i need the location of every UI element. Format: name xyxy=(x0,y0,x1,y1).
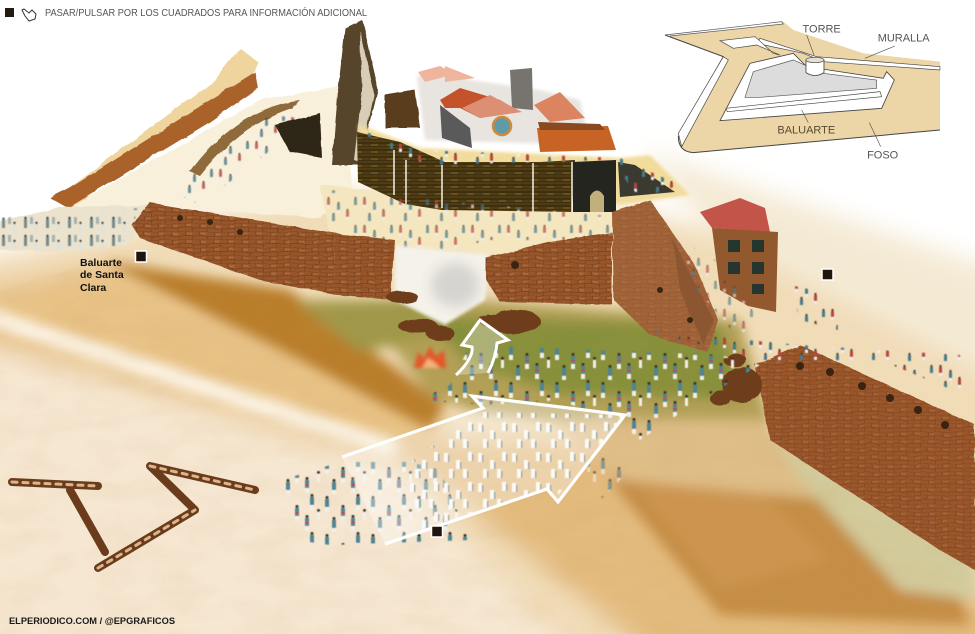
hotspot marker: right xyxy=(822,269,833,280)
rubble in the breach xyxy=(386,291,762,406)
label: Baluarte de Santa Clara: de Santa xyxy=(80,269,124,281)
arrow: main assault direction xyxy=(342,396,625,544)
arrow: breach direction xyxy=(456,320,508,375)
label: Baluarte de Santa Clara: Baluarte xyxy=(80,257,122,269)
icon: pointing hand xyxy=(22,9,36,21)
loopholes in walls xyxy=(177,215,949,429)
inset: fortress diagram: TORRE xyxy=(803,24,841,36)
legend: hover instruction: PASAR/PULSAR POR LOS CUADRADOS PARA INFORMACIÓN ADICIONAL xyxy=(45,8,368,19)
defenders on the wall walk xyxy=(320,130,680,260)
inset: fortress diagram: BALUARTE xyxy=(777,125,835,137)
upper fortress wall xyxy=(357,124,690,212)
terrain: upper left rampart bank xyxy=(0,48,650,255)
hotspot marker: arrow xyxy=(432,526,442,537)
smoke in the breach xyxy=(431,263,479,307)
assaulting infantry xyxy=(282,240,965,545)
terrain: base ground and moat xyxy=(0,150,975,634)
brick bastion walls xyxy=(132,200,975,570)
breached slope, white debris xyxy=(395,245,490,325)
ruined tower xyxy=(275,20,420,165)
label: Baluarte de Santa Clara: Clara xyxy=(80,282,106,294)
inset: fortress diagram xyxy=(665,22,940,162)
inset: fortress diagram: FOSO xyxy=(867,150,899,162)
inset: fortress diagram: MURALLA xyxy=(878,32,930,44)
credit: ELPERIODICO.COM / @EPGRAFICOS xyxy=(9,616,175,627)
red-roofed house xyxy=(700,198,778,312)
hotspot marker: Santa Clara xyxy=(136,251,146,262)
town buildings xyxy=(417,66,616,152)
soldiers on the left slope xyxy=(0,115,320,250)
fire xyxy=(414,346,446,368)
siege trenches xyxy=(12,466,255,568)
